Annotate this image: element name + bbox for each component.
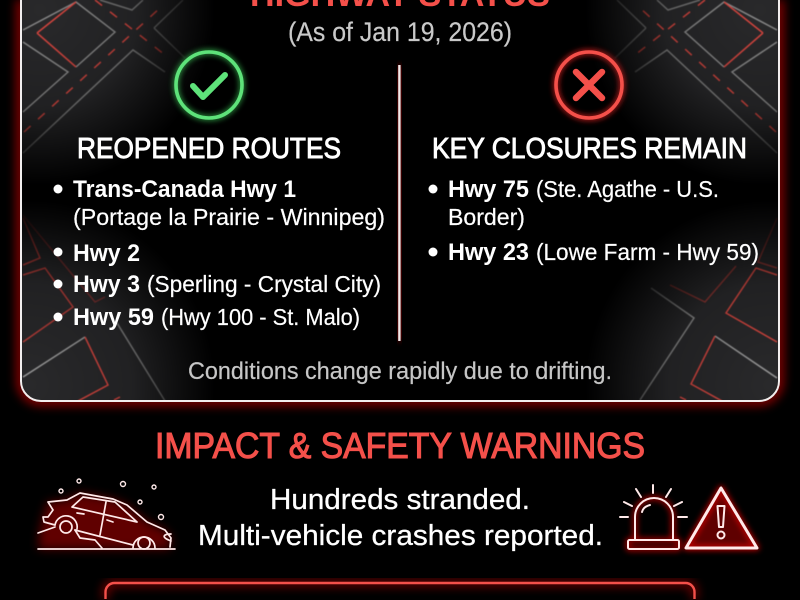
heading: reopened routes: REOPENED ROUTES: [77, 133, 341, 165]
list: reopened routes: (Sperling - Crystal City): [147, 271, 381, 297]
list: key closures: (Lowe Farm - Hwy 59): [536, 239, 759, 265]
list: reopened routes: Hwy 59: [73, 304, 154, 331]
list: key closures: (Ste. Agathe - U.S.: [536, 176, 719, 202]
icon: warning triangle: [686, 488, 757, 548]
list: key closures: Hwy 23: [448, 239, 529, 266]
text: impact summary: [198, 484, 603, 552]
heading: impact and safety warnings: IMPACT & SAFETY WARNINGS: [155, 425, 645, 466]
list: reopened routes: Hwy 2: [73, 240, 140, 267]
list: reopened routes: (Portage la Prairie - Winnipeg): [73, 204, 385, 230]
list: key closures: [428, 176, 759, 266]
heading: key closures remain: KEY CLOSURES REMAIN: [432, 133, 747, 165]
list: reopened routes: Hwy 3: [73, 271, 140, 298]
icon: crashed car in snow: [38, 479, 175, 549]
list: key closures: Hwy 75: [448, 176, 529, 203]
text: impact summary: Hundreds stranded.: [270, 484, 530, 516]
list: key closures: Border): [448, 204, 525, 230]
road map background pattern: [22, 0, 778, 402]
panel: bottom callout: [106, 583, 694, 599]
list: reopened routes: [54, 176, 385, 331]
list: reopened routes: (Hwy 100 - St. Malo): [161, 304, 360, 330]
divider: [398, 65, 401, 341]
icon: red cross: [556, 52, 622, 118]
list: reopened routes: Trans-Canada Hwy 1: [73, 176, 296, 203]
text: impact summary: Multi-vehicle crashes reported.: [198, 520, 603, 552]
icon: green check: [176, 52, 242, 118]
text: date: (As of Jan 19, 2026): [288, 17, 512, 47]
panel: highway status: [21, 0, 779, 402]
icon: siren: [620, 485, 687, 549]
text: conditions note: Conditions change rapidly due to drifting.: [188, 358, 612, 385]
